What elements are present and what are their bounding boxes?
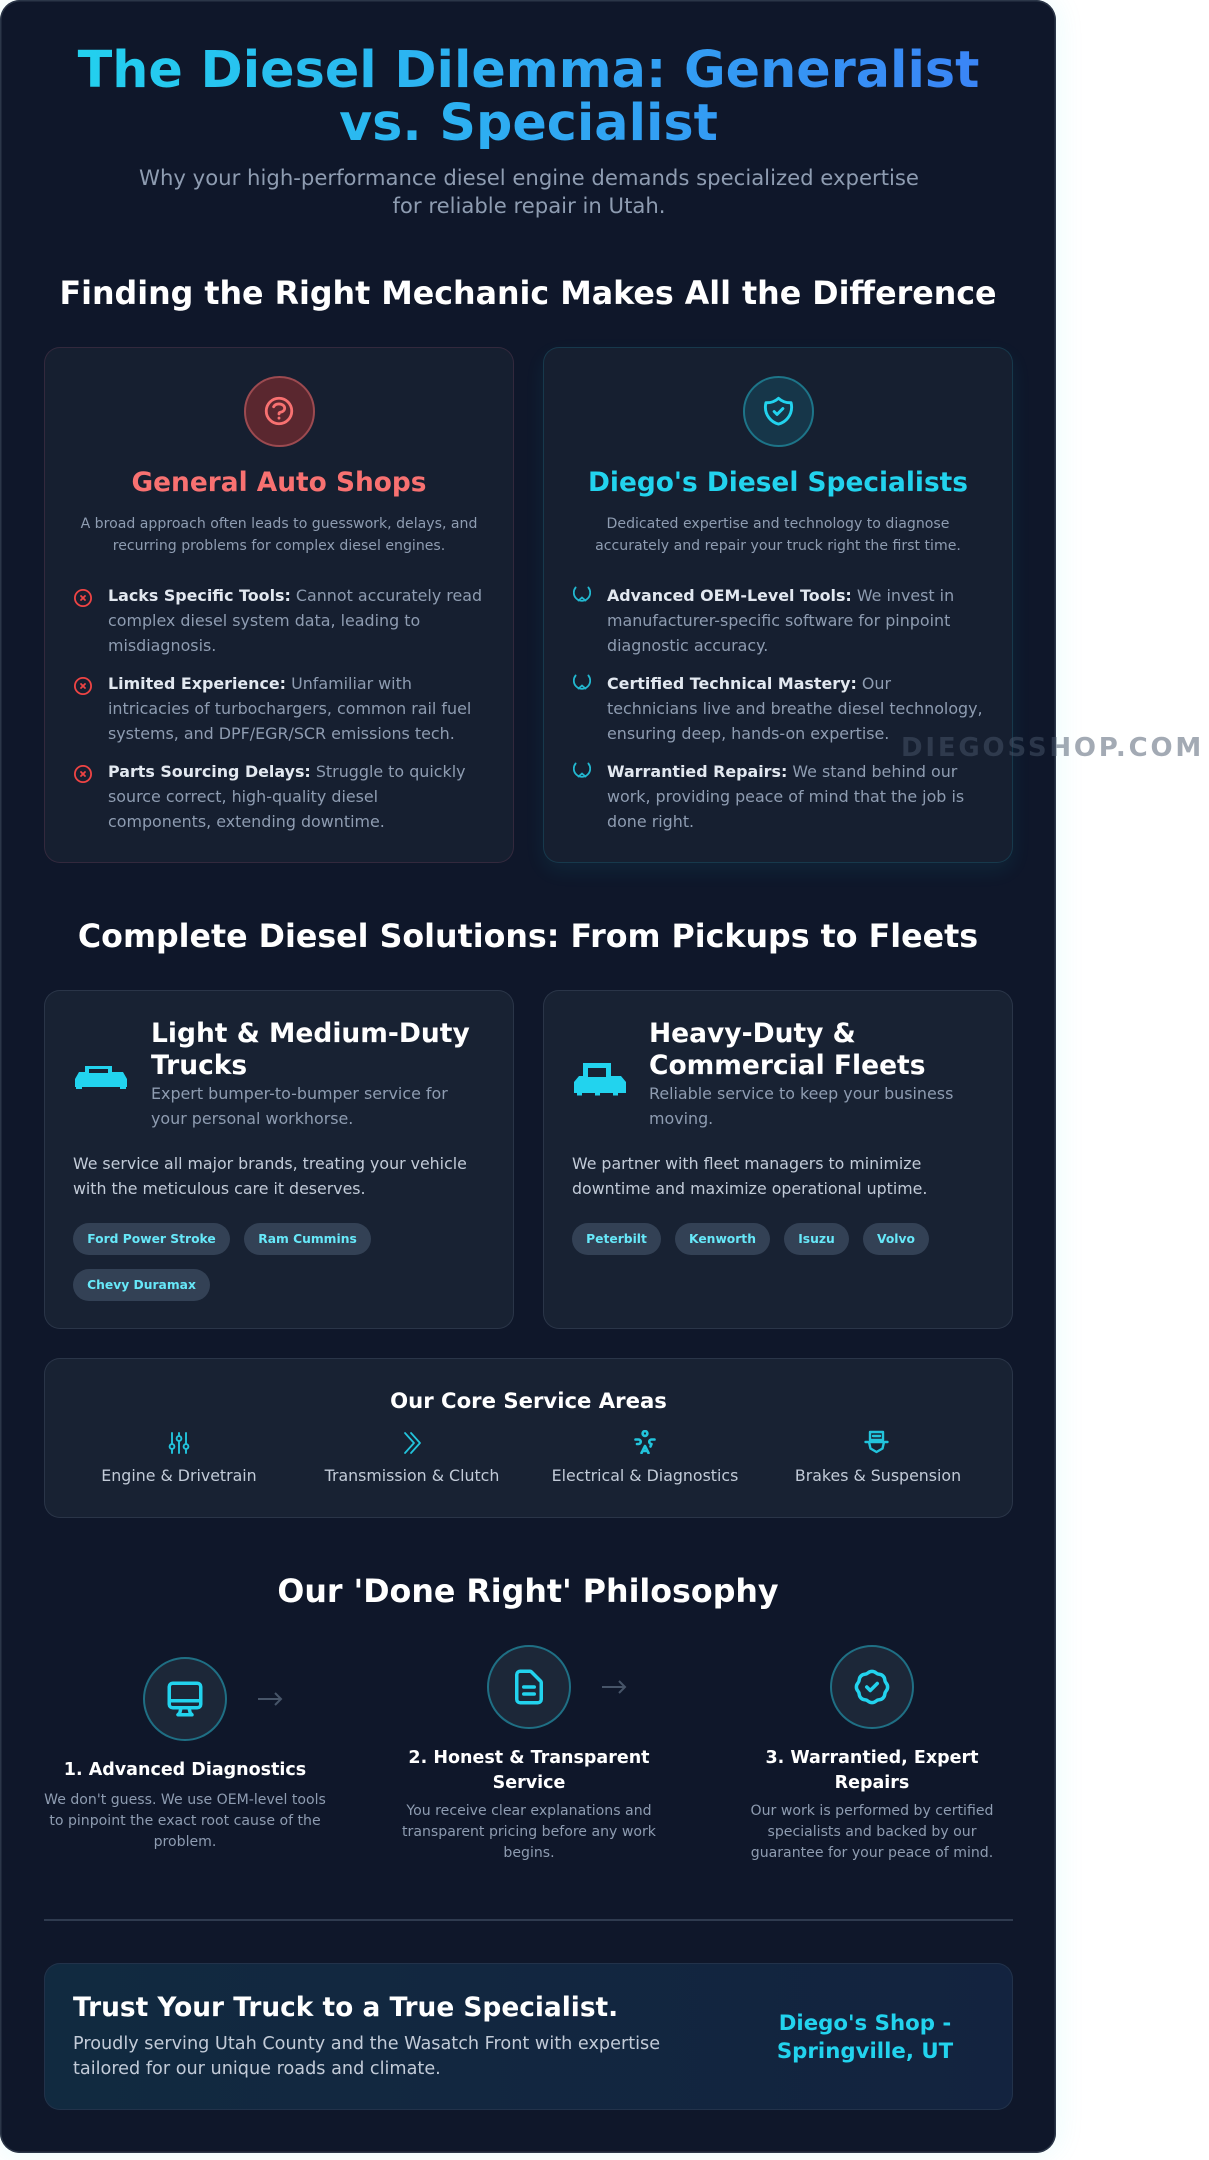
step title: 3. Warrantied, Expert [765,1748,979,1768]
icon: partial check circle [573,586,591,602]
step description: transparent pricing before any work [402,1824,656,1840]
item: warrantied repairs [607,762,964,831]
icon: x circle [74,677,92,695]
description: A broad approach often leads to guesswork, delays, and [81,516,477,532]
heading: light and medium-duty [151,1018,470,1081]
item: lacks specific tools: Lacks Specific Tools: Cannot accurately read [108,586,482,605]
item: lacks specific tools [108,586,482,655]
subheading: moving. [649,1109,713,1128]
location [777,2011,954,2064]
step description: We don't guess. We use OEM-level tools [44,1792,326,1808]
heading: heavy-duty and commercial fleets: Heavy-Duty & [649,1018,856,1049]
step title [408,1748,650,1793]
item: parts sourcing delays [108,762,466,831]
step description [751,1802,993,1860]
description [73,1154,467,1198]
item: limited experience: systems, and DPF/EGR/SCR emissions tech. [108,724,455,743]
icon: shield check [742,376,814,446]
step title [765,1748,979,1793]
description [572,1154,927,1198]
icon: brake caliper [864,1430,889,1454]
item: limited experience [108,674,471,743]
icon: chevrons [404,1432,421,1454]
item: parts sourcing delays: source correct, high-quality diesel [108,787,378,806]
panel: call to action [44,1963,1013,2110]
panel: heavy-duty and commercial fleets [543,990,1013,1329]
step title: Repairs [835,1773,909,1793]
location: Diego's Shop - [779,2011,951,2036]
step 3: warrantied, expert repairs [751,1645,993,1860]
heading: diego's diesel specialists: Diego's Diesel Specialists [588,467,968,498]
tag [572,1223,661,1255]
step title: 2. Honest & Transparent [408,1748,650,1768]
step 1: advanced diagnostics [44,1657,326,1850]
subheading: Expert bumper-to-bumper service for [151,1084,448,1103]
heading: finding the right mechanic: Finding the Right Mechanic Makes All the Difference [59,276,997,312]
tag: Kenworth [689,1232,756,1246]
tag [73,1223,230,1255]
panel: core service areas [44,1358,1013,1518]
cta text: tailored for our unique roads and climate. [73,2059,441,2079]
subheading [151,1084,448,1128]
item: limited experience: intricacies of turbochargers, common rail fuel [108,699,471,718]
item: advanced oem-level tools: Advanced OEM-Level Tools: We invest in [607,586,954,605]
step description: specialists and backed by our [768,1824,976,1840]
icon: partial check circle [573,674,591,690]
item: warrantied repairs: done right. [607,812,694,831]
description: with the meticulous care it deserves. [73,1179,366,1198]
item: advanced oem-level tools [607,586,954,655]
item: certified technical mastery: ensuring deep, hands-on expertise. [607,724,889,743]
item: certified technical mastery: Certified Technical Mastery: Our [607,674,891,693]
item: parts sourcing delays: Parts Sourcing Delays: Struggle to quickly [108,762,466,781]
tag [73,1269,210,1301]
heading: done right philosophy: Our 'Done Right' Philosophy [277,1574,779,1610]
label: transmission and clutch: Transmission & Clutch [325,1466,499,1485]
heading: complete diesel solutions: Complete Diesel Solutions: From Pickups to Fleets [78,919,978,955]
icon: pickup truck [75,1066,127,1089]
step description [44,1792,326,1850]
heading: heavy-duty and commercial fleets [649,1018,925,1081]
heading: light and medium-duty: Light & Medium-Duty [151,1018,470,1049]
tag [244,1223,371,1255]
panel: light and medium-duty trucks [44,990,514,1329]
item: warrantied repairs: work, providing peace of mind that the job is [607,787,964,806]
cta text [73,2034,660,2079]
icon: badge check [830,1645,914,1729]
step title: Service [493,1773,565,1793]
panel: diego's diesel specialists [543,347,1013,863]
icon: circuit nodes [634,1430,656,1454]
tag: Volvo [877,1232,915,1246]
icon: question mark [244,376,314,446]
description: Dedicated expertise and technology to diagnose [607,516,949,532]
item: limited experience: Limited Experience: Unfamiliar with [108,674,412,693]
tag [784,1223,849,1255]
icon: heavy truck [574,1063,626,1096]
step description: to pinpoint the exact root cause of the [49,1812,321,1828]
step title: 1. Advanced Diagnostics [64,1760,306,1780]
description: recurring problems for complex diesel engines. [113,538,445,554]
heading: heavy-duty and commercial fleets: Commercial Fleets [649,1050,925,1081]
tag: Isuzu [798,1232,835,1246]
icon: sliders [168,1432,190,1454]
step description: Our work is performed by certified [751,1802,993,1818]
icon: x circle [74,589,92,607]
tag: Chevy Duramax [87,1278,196,1292]
step description: You receive clear explanations and [406,1802,652,1818]
heading: general auto shops: General Auto Shops [132,467,426,498]
step 2: honest and transparent service [402,1645,656,1860]
item: advanced oem-level tools: manufacturer-specific software for pinpoint [607,611,950,630]
tag [675,1223,770,1255]
item: parts sourcing delays: components, extending downtime. [108,812,385,831]
label: engine and drivetrain: Engine & Drivetrain [101,1466,257,1485]
subheading: Reliable service to keep your business [649,1084,953,1103]
item: advanced oem-level tools: diagnostic accuracy. [607,636,768,655]
cta text: Proudly serving Utah County and the Wasatch Front with expertise [73,2034,660,2054]
icon: partial check circle [573,762,591,778]
watermark: DIEGOSSHOP.COM [901,733,1204,763]
step description [402,1802,656,1860]
item: lacks specific tools: misdiagnosis. [108,636,216,655]
location: Springville, UT [777,2039,953,2064]
description: We service all major brands, treating your vehicle [73,1154,467,1173]
subtitle: for reliable repair in Utah. [392,193,666,218]
item: warrantied repairs: Warrantied Repairs: We stand behind our [607,762,957,781]
label: electrical and diagnostics: Electrical & Diagnostics [552,1466,738,1485]
item: certified technical mastery: technicians live and breathe diesel technology, [607,699,983,718]
icon: document [487,1645,571,1729]
title: vs. Specialist [339,93,718,152]
title [44,44,1013,149]
subheading [649,1084,953,1128]
label: brakes and suspension: Brakes & Suspension [795,1466,961,1485]
description [595,516,961,554]
item: certified technical mastery [607,674,983,743]
icon: monitor [143,1657,227,1741]
description: downtime and maximize operational uptime. [572,1179,927,1198]
cta heading: Trust Your Truck to a True Specialist. [73,1992,618,2023]
description: accurately and repair your truck right the first time. [595,538,961,554]
step description: guarantee for your peace of mind. [751,1844,993,1860]
tag: Peterbilt [586,1232,647,1246]
icon: x circle [74,765,92,783]
step description: problem. [154,1834,216,1850]
subheading: your personal workhorse. [151,1109,353,1128]
subtitle [139,165,919,218]
tag: Ram Cummins [258,1232,357,1246]
heading: core service areas: Our Core Service Areas [390,1388,667,1413]
description [80,516,477,554]
description: We partner with fleet managers to minimize [572,1154,921,1173]
panel: general auto shops [44,347,514,863]
step description: begins. [503,1844,555,1860]
tag [863,1223,929,1255]
heading: light and medium-duty: Trucks [151,1050,247,1081]
arrow [258,1692,282,1706]
arrow [602,1680,626,1694]
tag: Ford Power Stroke [87,1232,216,1246]
title: The Diesel Dilemma: Generalist [78,40,979,99]
subtitle: Why your high-performance diesel engine demands specialized expertise [139,165,919,190]
item: lacks specific tools: complex diesel system data, leading to [108,611,420,630]
